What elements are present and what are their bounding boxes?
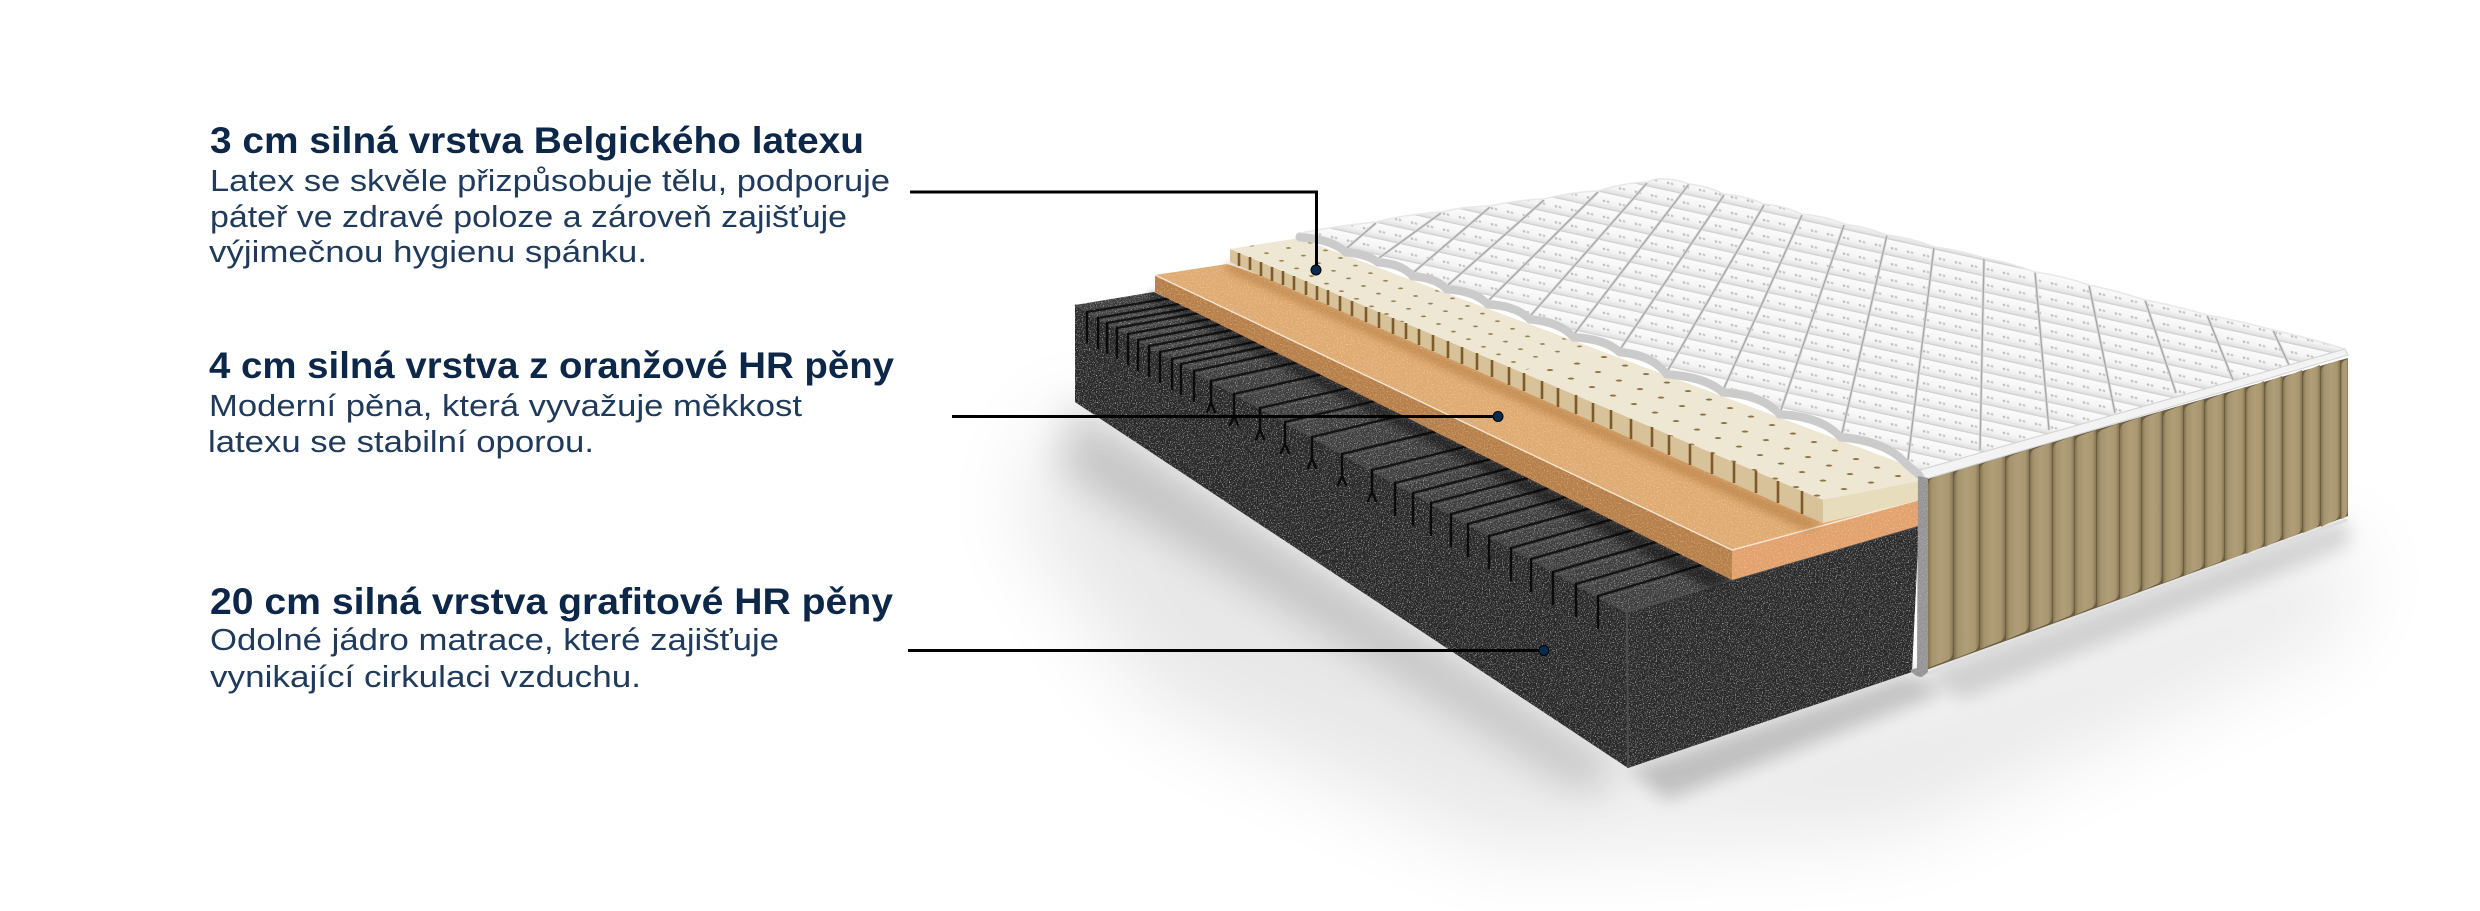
- leader: latex: [910, 192, 1321, 275]
- heading: graphite foam: 20 cm silná vrstva grafitové HR pěny: [210, 581, 893, 622]
- leader: graphite foam: [908, 646, 1549, 656]
- cut edge strip: [1910, 476, 1928, 677]
- quilted cover back edge: [1301, 179, 2345, 349]
- leader: orange foam: [952, 412, 1503, 422]
- text block: graphite foam layer: [210, 581, 893, 694]
- floor shadow: [1020, 400, 2360, 850]
- latex layer: [1230, 238, 1925, 523]
- top piping: [1920, 349, 2348, 479]
- description: latex: páteř ve zdravé poloze a zároveň zajišťuje: [210, 199, 847, 234]
- description: latex: [209, 163, 890, 269]
- side panel ribs: [1926, 358, 2348, 670]
- heading: latex: 3 cm silná vrstva Belgického latexu: [210, 120, 864, 161]
- text block: orange foam layer: [208, 345, 894, 459]
- text block: latex layer: [209, 120, 890, 269]
- orange HR foam layer: [1155, 262, 1920, 580]
- description: graphite foam: vynikající cirkulaci vzduchu.: [210, 659, 641, 694]
- quilted cover: [1290, 170, 2360, 480]
- heading: orange foam: 4 cm silná vrstva z oranžové HR pěny: [209, 345, 894, 386]
- description: orange foam: [208, 388, 802, 459]
- mattress cutaway: [1075, 170, 2360, 768]
- description: graphite foam: Odolné jádro matrace, které zajišťuje: [210, 622, 779, 657]
- description: graphite foam: [210, 622, 779, 694]
- description: orange foam: latexu se stabilní oporou.: [208, 424, 594, 459]
- description: orange foam: Moderní pěna, která vyvažuje měkkost: [209, 388, 802, 423]
- graphite foam layer: [1075, 292, 1919, 768]
- quilting seams: [1347, 183, 2289, 460]
- grooves on top surface: [1087, 292, 1720, 628]
- bottom piping: [1926, 520, 2347, 674]
- latex cuts: [1239, 253, 1802, 514]
- seam shading: [1347, 183, 2289, 460]
- description: latex: Latex se skvěle přizpůsobuje tělu, podporuje: [210, 163, 890, 198]
- cut edge of quilted cover: [1300, 237, 1921, 476]
- description: latex: výjimečnou hygienu spánku.: [209, 234, 647, 269]
- perforation holes: [1230, 238, 1925, 500]
